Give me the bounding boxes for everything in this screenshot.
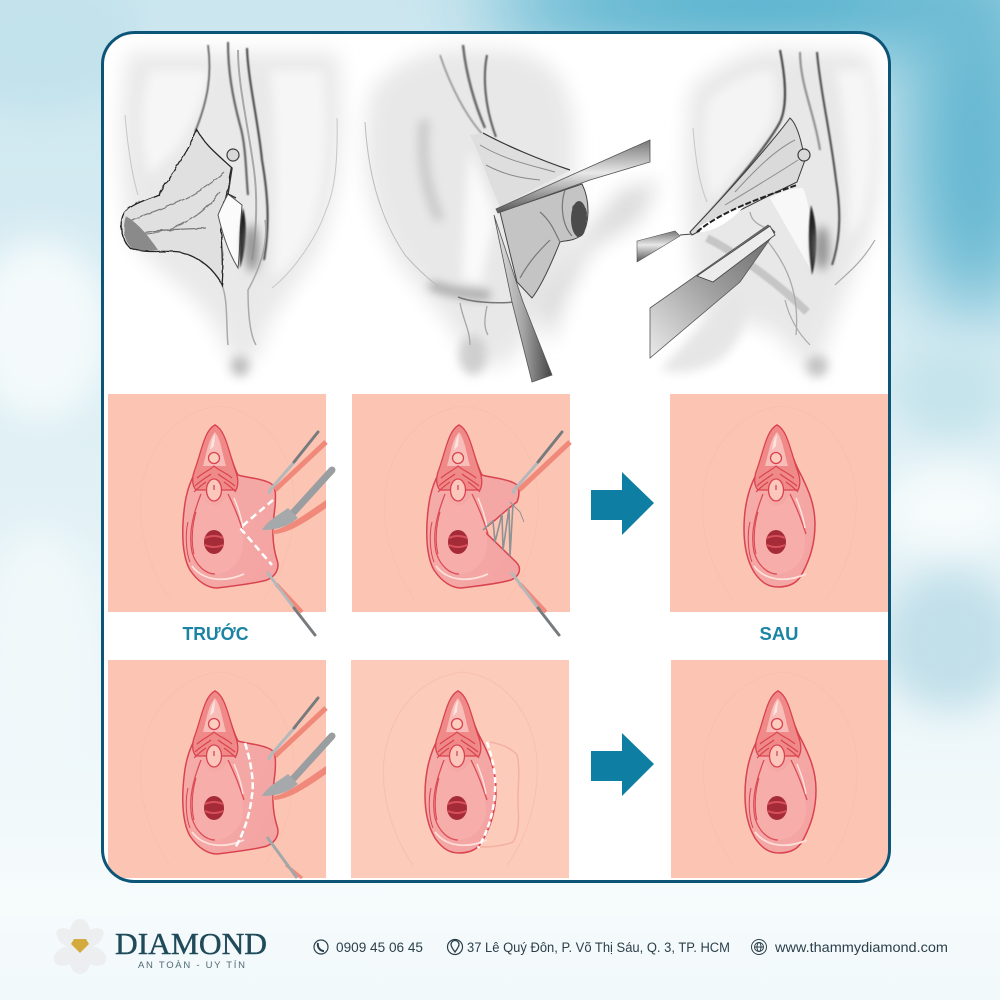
contact: website: www.thammydiamond.com (774, 940, 948, 955)
inner wedge (218, 194, 242, 268)
diagram: row 1 after excision, sutures (352, 394, 570, 635)
right fold and opening (770, 188, 812, 272)
contact: address: 37 Lê Quý Đôn, P. Võ Thị Sáu, Q. 3, TP. HCM (467, 940, 730, 955)
excess tissue (121, 130, 232, 285)
diagram: row 2 result (671, 660, 888, 878)
forceps (650, 225, 775, 358)
panel border (102, 32, 890, 882)
shading (686, 49, 880, 372)
panel: main card (103, 33, 889, 881)
former outline (480, 742, 519, 847)
logo diamond (71, 939, 89, 953)
suture line (478, 742, 495, 848)
forceps lower (494, 215, 552, 382)
diagram: row 1 result (670, 394, 888, 612)
needle holder (637, 231, 680, 262)
arrow: row 2 (591, 733, 654, 796)
contact: phone: 0909 45 06 45 (336, 940, 423, 955)
label: after: SAU (760, 624, 798, 644)
shading (365, 49, 575, 368)
sutures (483, 504, 513, 556)
incision line (240, 500, 273, 565)
clamped tissue (500, 184, 588, 298)
logo: Diamond (50, 919, 267, 974)
vertical folds (463, 45, 485, 128)
incision line (235, 743, 253, 848)
icon: pin (448, 940, 462, 954)
instruments (262, 432, 332, 635)
icon: globe (752, 940, 766, 954)
vertical folds (692, 50, 785, 232)
arrow: row 1 (591, 472, 654, 535)
instruments (262, 698, 332, 878)
logo tagline: AN TOÀN - UY TÍN (138, 960, 245, 971)
thigh contours (125, 115, 337, 288)
label: before: TRƯỚC (182, 623, 248, 644)
diagram: row 1 before, incision (108, 394, 332, 635)
icon: phone (314, 940, 328, 954)
vertical folds (195, 45, 209, 132)
diagram: row 2 before, curved incision (108, 660, 332, 878)
illustration: excision and suture (637, 49, 880, 377)
flap with suture (690, 118, 805, 235)
illustration: traction with forceps (365, 45, 660, 382)
shading (121, 52, 341, 375)
diagram: row 2 closure (351, 660, 569, 878)
forceps upper (496, 140, 650, 213)
upper tissue (470, 133, 570, 207)
logo wordmark: DIAMOND (115, 926, 267, 961)
instruments (511, 432, 570, 635)
illustration: before, excess tissue (121, 42, 341, 376)
logo flower (50, 919, 110, 974)
